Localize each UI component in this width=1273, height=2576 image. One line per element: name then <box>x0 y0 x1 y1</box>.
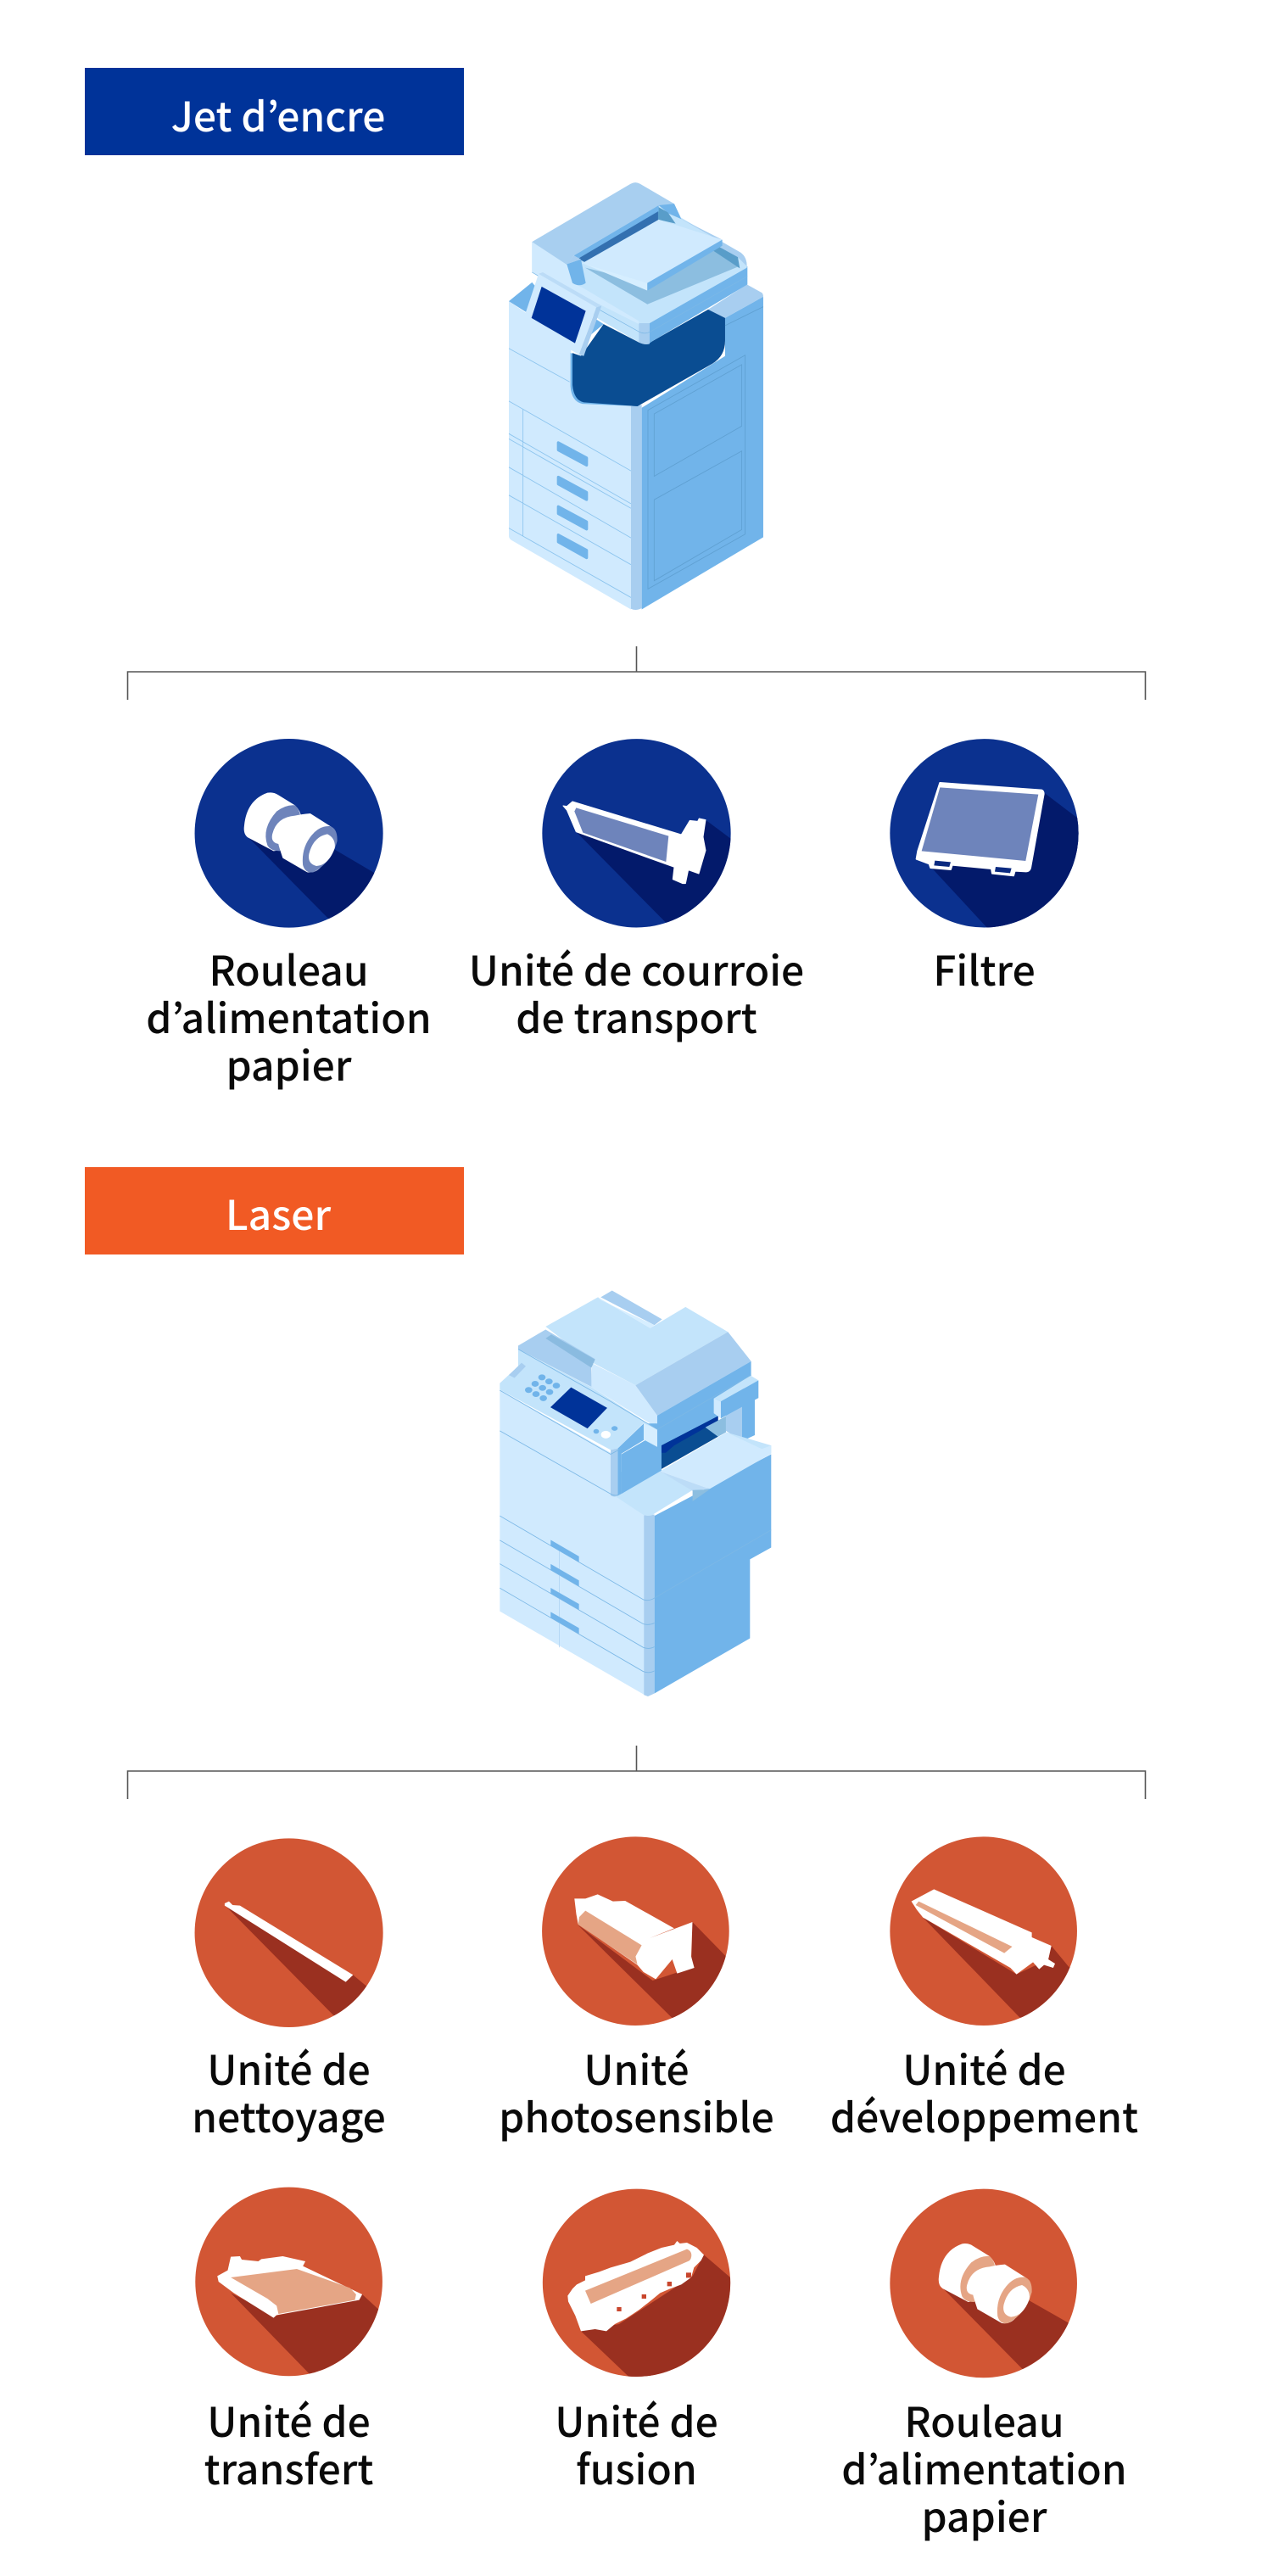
illustration: laser printer <box>500 1290 771 1696</box>
label: Rouleau d'alimentation papier (laser): d’alimentation <box>841 2437 1127 2496</box>
label: Rouleau d'alimentation papier: d’alimentation <box>146 986 432 1045</box>
label: Unité de fusion: Unité de <box>555 2389 718 2449</box>
label: Unité de fusion: fusion <box>576 2437 697 2496</box>
label: Unité de développement: Unité de <box>902 2037 1066 2097</box>
icon: transfer unit <box>195 2187 382 2377</box>
label: Unité de transfert: Unité de <box>207 2389 371 2449</box>
label: Rouleau d'alimentation papier (laser): papier <box>922 2484 1047 2544</box>
label: Unité photosensible: photosensible <box>499 2085 774 2144</box>
icon: feed roller (inkjet) <box>195 739 383 928</box>
connector: laser parts <box>127 1746 1145 1799</box>
control panel and screen <box>522 272 601 356</box>
label: Unité de courroie de transport: Unité de courroie <box>469 938 804 997</box>
connector: inkjet parts <box>127 646 1145 700</box>
label: Rouleau d'alimentation papier: Rouleau <box>209 938 369 997</box>
label: Unité de développement: développement <box>830 2085 1138 2144</box>
touch screen <box>550 1388 607 1428</box>
illustration: inkjet printer <box>509 182 763 610</box>
icon: photosensitive unit <box>542 1836 729 2026</box>
section header: Jet d'encre: Jet d’encre <box>171 84 385 143</box>
drawer handles <box>558 443 587 557</box>
icon: cleaning unit <box>195 1838 383 2027</box>
icon: feed roller (laser) <box>890 2188 1077 2378</box>
section header: Laser <box>85 1167 464 1254</box>
label: Rouleau d'alimentation papier (laser): Rouleau <box>904 2389 1064 2449</box>
icon: filter <box>890 739 1086 933</box>
label: Unité de nettoyage: Unité de <box>207 2037 371 2097</box>
section header: Jet d'encre <box>85 68 464 155</box>
label: Unité de courroie de transport: de transport <box>516 986 757 1045</box>
label: Filtre: Filtre <box>933 938 1036 997</box>
label: Rouleau d'alimentation papier: papier <box>226 1033 352 1092</box>
drawer handles <box>550 1540 579 1634</box>
keypad buttons <box>525 1374 617 1433</box>
icon: transport belt unit <box>542 739 738 933</box>
icon: fusing unit <box>543 2189 738 2383</box>
label: Unité de nettoyage: nettoyage <box>192 2085 386 2144</box>
label: Unité photosensible: Unité <box>583 2037 690 2097</box>
icon: developing unit <box>890 1836 1077 2026</box>
section header: Laser: Laser <box>226 1182 331 1242</box>
label: Unité de transfert: transfert <box>204 2437 373 2496</box>
